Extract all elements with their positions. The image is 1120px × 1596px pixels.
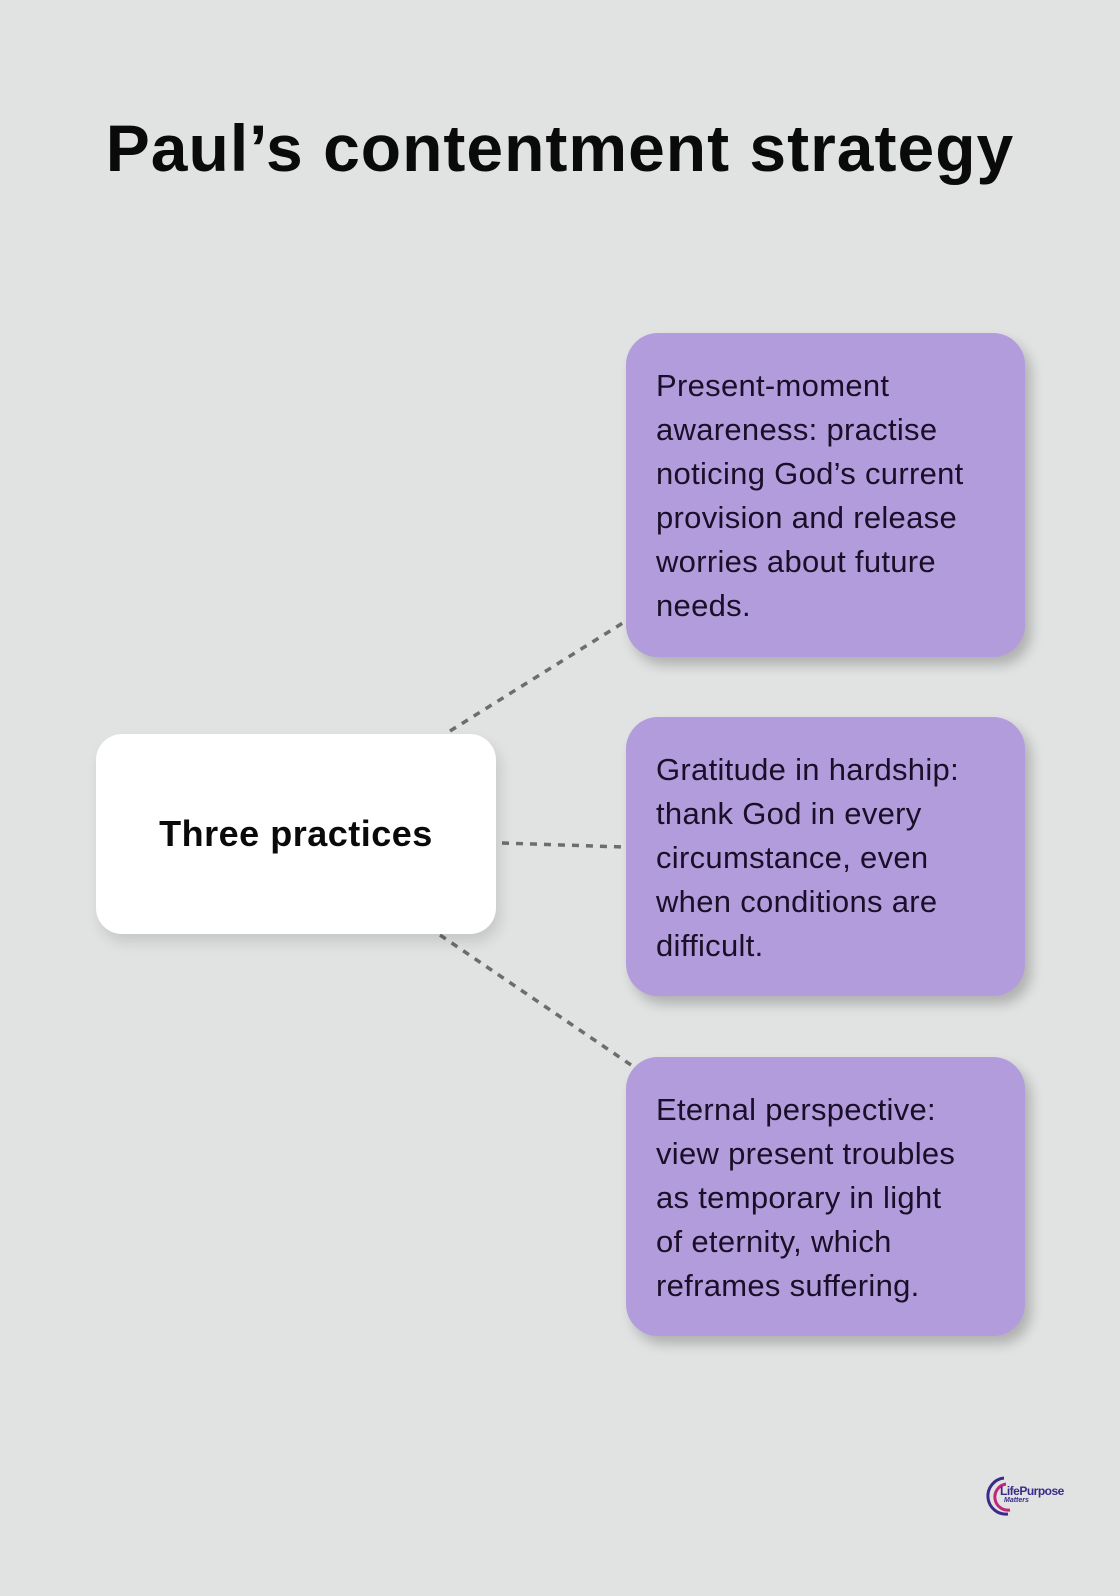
box: eternal perspective: Eternal perspective: <box>656 1092 936 1127</box>
central node: three practices: Three practices <box>159 813 433 854</box>
box: eternal perspective: of eternity, which <box>656 1224 892 1259</box>
box: present-moment awareness: needs. <box>656 588 751 623</box>
box: present-moment awareness: awareness: practise <box>656 412 937 447</box>
central node: three practices <box>96 734 496 934</box>
box: present-moment awareness: noticing God’s current <box>656 456 964 491</box>
box: gratitude in hardship <box>626 717 1025 996</box>
box: gratitude in hardship: Gratitude in hardship: <box>656 752 959 787</box>
box: gratitude in hardship: thank God in every <box>656 796 922 831</box>
logo: LifePurpose <box>1000 1484 1064 1498</box>
title: Paul’s contentment strategy <box>106 111 1014 185</box>
box: present-moment awareness: worries about future <box>656 544 936 579</box>
box: gratitude in hardship: difficult. <box>656 928 764 963</box>
box: present-moment awareness: provision and release <box>656 500 957 535</box>
box: eternal perspective: as temporary in light <box>656 1180 941 1215</box>
box: present-moment awareness <box>626 333 1025 657</box>
logo: Matters <box>1004 1497 1029 1504</box>
box: eternal perspective: reframes suffering. <box>656 1268 920 1303</box>
box: present-moment awareness: Present-moment <box>656 368 889 403</box>
box: eternal perspective <box>626 1057 1025 1336</box>
box: eternal perspective: view present troubles <box>656 1136 955 1171</box>
logo <box>986 1476 1064 1516</box>
box: gratitude in hardship: when conditions are <box>656 884 937 919</box>
box: gratitude in hardship: circumstance, even <box>656 840 928 875</box>
